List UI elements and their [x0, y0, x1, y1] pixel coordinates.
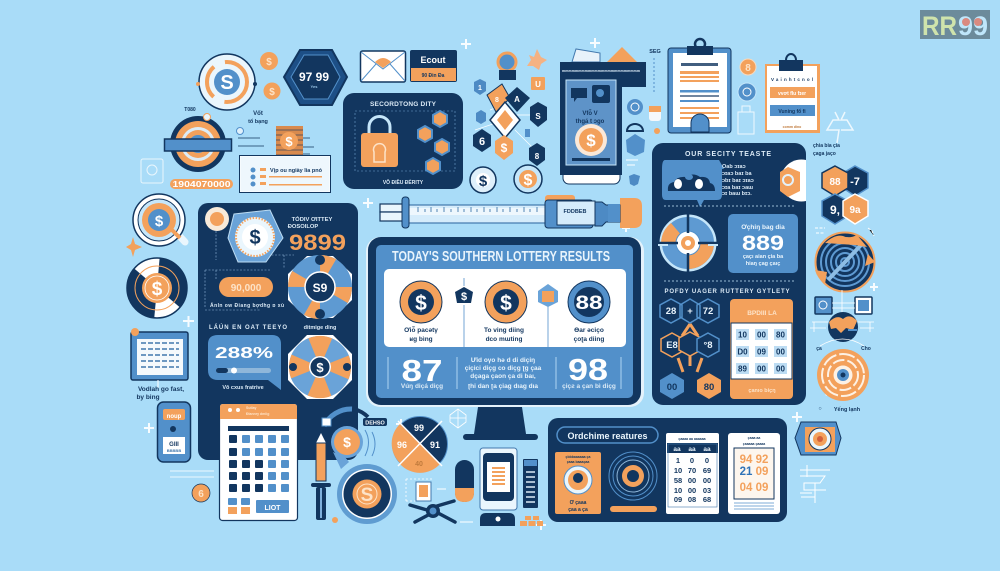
center text: Ưîd oγo hə d di diçiŋ — [471, 357, 535, 364]
center text: dçaga çaon ça di baı, — [470, 373, 536, 380]
caption bottom right — [818, 406, 861, 413]
logo: RR99 — [920, 10, 990, 41]
pill: dehso: DEHSO — [365, 420, 385, 426]
panel: security — [343, 93, 463, 189]
center text — [465, 357, 542, 390]
pie chart: 40 — [415, 461, 423, 468]
icon: smartphone with cash — [560, 47, 646, 184]
numbers card: çaaa aa — [748, 436, 760, 440]
orange card: çaaa baaaçaa — [567, 460, 589, 464]
icon: orange clipboard: Vainhtcnol — [771, 77, 813, 82]
icon: logo circle — [205, 207, 229, 231]
heading: results: TODAY'S SOUTHERN LOTTERY RESULTS — [392, 249, 610, 265]
panel: our security — [652, 143, 806, 405]
grid card: 10 — [738, 330, 747, 340]
radial target — [609, 452, 657, 512]
icon: dollar wheel — [127, 258, 187, 318]
icon: target with bar: T080 — [184, 107, 196, 113]
caption top right: çaga jaço — [813, 151, 836, 157]
hex network: E8 — [666, 340, 678, 351]
center text: çiçici diçg co diçg ʈg çaa — [465, 365, 542, 372]
table card: 68 — [703, 495, 711, 504]
icon: orange clipboard: comm dino — [783, 125, 801, 129]
grid card: 80 — [776, 330, 785, 340]
icon: eye hex — [795, 422, 841, 455]
caption: Ánln ow Điang bợdhg ɒ xù — [210, 302, 284, 309]
orange card: çbbbaaaaaa ça — [566, 455, 591, 459]
small side icons by phone: SEG — [649, 49, 661, 55]
table card: 0 — [705, 456, 709, 465]
grid card — [730, 299, 793, 399]
caption: document: by bing — [136, 394, 160, 401]
icon: orange coin small — [170, 471, 214, 502]
diamond network icons: $ — [501, 141, 508, 155]
stat box: 889: çaçı aian çia ba — [743, 254, 784, 260]
table card: 10 — [674, 466, 682, 475]
text block — [722, 164, 754, 197]
badge: dollar hexagon — [228, 210, 283, 262]
decorative circuit lines — [800, 465, 830, 503]
hex cluster: 88 — [829, 177, 841, 188]
heading: security team: OUR SECITY TEASTE — [685, 151, 771, 158]
icon: outline cube — [450, 409, 466, 428]
button: Ecout: Ecout — [420, 55, 446, 65]
table card: 03 — [703, 486, 711, 495]
numbers card: 94 92 — [740, 454, 768, 466]
icon: person and star: U — [535, 80, 541, 89]
icon: gauge arc with coin — [322, 409, 375, 469]
panel: online resources — [548, 418, 787, 522]
pill: dehso — [363, 418, 387, 426]
diamond network icons: $ — [479, 173, 488, 190]
label: lauin: LÁÚN EN OAT TEEYO — [209, 324, 287, 331]
ball 2: $ — [500, 292, 512, 315]
heading pill — [557, 427, 658, 443]
hexagon number badge: Yes — [311, 84, 318, 89]
calculator — [220, 404, 298, 520]
info card with hatched coin: Vịp ou ngiày lia pnó — [270, 168, 322, 174]
labels: To ving diing — [484, 327, 524, 334]
label pair: Cho — [861, 346, 871, 352]
pie chart: 99 — [414, 423, 424, 433]
text block: ɔɪ baɯ bɪɔ. — [722, 191, 752, 197]
small side icons by phone — [626, 49, 661, 186]
callout: 288% — [208, 335, 281, 390]
icon: magnifier target — [133, 194, 185, 246]
icon: fingerprint — [815, 228, 875, 292]
table card: çaaaa aa aaaaaa — [678, 437, 706, 441]
marker: shield — [538, 284, 558, 307]
icon: capsule — [455, 460, 474, 502]
grid card: 09 — [757, 348, 766, 356]
caption: percent: Vô cxus fratrive — [222, 385, 264, 391]
speech bubble with eyes — [662, 160, 724, 207]
label: vót tổ bạng — [248, 110, 268, 125]
icon: star spark — [126, 237, 142, 257]
octagon: dollar — [288, 335, 352, 399]
numbers card: 21 09 — [740, 466, 768, 478]
table card: 10 — [674, 486, 682, 495]
label pair: ça — [816, 346, 822, 352]
grid card: 00 — [776, 364, 785, 374]
ball 3: 88 — [576, 293, 602, 314]
heading: today lottery: TÓDIV ƠITTEY — [292, 215, 332, 223]
table card: 00 — [688, 486, 696, 495]
diamond network icons: A — [514, 95, 520, 104]
caption: 98: çiçƨ a çan bì diçg — [562, 383, 616, 390]
heading: poly usage: POFDY UAGER RUTTERY GYTLETY — [664, 289, 790, 295]
labels: Ɵar əciço — [574, 327, 604, 334]
pie chart — [392, 416, 448, 473]
table card: 09 — [674, 495, 682, 504]
number: 87: 87 — [402, 353, 442, 388]
icon: orange clipboard — [765, 54, 853, 143]
grid card: D0 — [737, 348, 748, 356]
icon: big dollar coin — [332, 464, 397, 524]
pill: amount — [219, 277, 273, 297]
pie chart: 91 — [430, 440, 440, 450]
icons: small orange coins: $ — [266, 57, 272, 68]
caption: document — [136, 386, 184, 401]
button: Ecout: 90 Đin Đa — [422, 73, 445, 79]
icon: bricks — [520, 516, 543, 526]
heading: today lottery: ĐOSOILOP — [288, 224, 318, 230]
hex cluster — [822, 166, 868, 224]
caption top right — [813, 143, 840, 157]
octagon: dollar: $ — [316, 360, 324, 375]
icon: half disc — [810, 312, 874, 342]
icon: smartphone with cash: $ — [586, 131, 596, 150]
ball 3 — [568, 281, 610, 323]
syringe bar: FDDBEB — [564, 209, 586, 215]
calculator: Sutlay — [246, 406, 257, 410]
icon: orange maze circle — [817, 349, 869, 401]
info card with hatched coin — [236, 126, 330, 192]
icon: small device: BBBBB — [167, 448, 181, 453]
icon: smartphone with cash: mmmmmmmmmmmmmmmmmmmmmmmm — [562, 69, 640, 73]
grid card: 00 — [757, 330, 766, 340]
numbers card — [728, 433, 780, 514]
icon: envelope — [360, 51, 406, 82]
callout: 288%: 288% — [215, 345, 273, 362]
ball 1 — [400, 281, 442, 323]
icon: battery — [523, 459, 538, 508]
table card: 58 — [674, 476, 682, 485]
labels — [404, 325, 604, 343]
panel: security: VÔ ĐIỀU ĐỂRITY — [383, 178, 424, 186]
orange card — [555, 452, 601, 514]
table card: 08 — [688, 495, 696, 504]
hexagon number badge — [284, 50, 347, 105]
icon: clipboard — [668, 39, 731, 133]
icon: smartphone with cash: thgá t ɔgo — [576, 119, 605, 125]
icon: outline camera — [141, 159, 163, 183]
monitor — [366, 237, 644, 440]
diamond network icons: 8 — [535, 152, 540, 161]
label: vót tổ bạng: tổ bạng — [248, 118, 268, 125]
small icons between clipboards — [738, 59, 756, 134]
hex group — [418, 111, 449, 174]
icon: small device — [158, 402, 190, 462]
icon: small device: noup — [167, 414, 182, 420]
table card: 1 — [676, 456, 680, 465]
stat box: 889: 889 — [742, 232, 784, 255]
icon: big dollar coin: S — [361, 485, 373, 506]
diamond network icons: S — [535, 112, 541, 121]
hex network: °8 — [703, 340, 713, 351]
grid card: BPDIII LA — [747, 310, 777, 317]
grid card: 89 — [738, 364, 747, 374]
stat box: 889: hiaŋ çag çaıç — [746, 261, 780, 267]
syringe bar — [380, 195, 642, 228]
text block: ɔɪaɔ baɪ ba — [722, 171, 752, 177]
calculator: LIOT — [265, 505, 281, 512]
icon: orange clipboard: Vuning fổ fi — [778, 108, 806, 115]
icon: smartphone with cash: Vfỗ V — [582, 110, 598, 117]
grid card: 00 — [757, 364, 766, 374]
table card — [666, 433, 719, 514]
icon: dollar coin top left: S — [220, 72, 234, 94]
octagon: S9 — [288, 255, 352, 319]
table card: aa — [703, 446, 711, 453]
heading pill: Ordchime reatures — [568, 431, 648, 442]
text block: Oab ɔɪaɔ — [722, 164, 746, 170]
caption: 87: Vúŋ diçá diçg — [401, 383, 443, 390]
numbers card: 04 09 — [740, 482, 768, 494]
badge: dollar hexagon: $ — [249, 227, 261, 249]
labels: çoʈa diing — [574, 336, 604, 343]
icon: document screen — [131, 328, 188, 388]
hex cluster: 9a — [849, 205, 861, 216]
pill: long number: 1904070000 — [172, 179, 231, 189]
icon: dollar coin top left — [196, 54, 257, 110]
labels: dco mɯting — [486, 336, 522, 343]
results card — [384, 269, 626, 347]
diamond network icons: 6 — [479, 136, 485, 148]
caption top right: çhia bia çia — [813, 143, 840, 149]
icon: padlock — [361, 117, 398, 167]
label pair — [816, 346, 871, 352]
label: ditmige: ditmige ding — [304, 325, 336, 331]
hex cluster: -7 — [850, 176, 860, 188]
icon: person and star — [498, 49, 547, 137]
icons: small orange coins — [260, 52, 280, 100]
stat box: 889 — [728, 214, 798, 273]
hex network: 80 — [704, 382, 714, 393]
caption bottom right: Yếng lạnh — [834, 406, 861, 413]
ball 1: $ — [415, 292, 427, 315]
numbers card: çaaaaa çaaaa — [743, 442, 765, 446]
marker: dollar hex: $ — [461, 291, 467, 303]
hex network: + — [687, 306, 693, 317]
marker: dollar hex — [455, 287, 473, 303]
small icons between clipboards: 8 — [745, 63, 751, 74]
heading: security: SECORDTONG DITY — [370, 101, 437, 108]
caption bottom right: ○ — [818, 406, 822, 412]
hexagon number badge: 97 99 — [299, 70, 329, 84]
center text: ʈhi dan ʈa çiag dıag dıa — [468, 383, 538, 390]
octagon: S9: S9 — [313, 281, 328, 295]
icon: gauge arc with coin: $ — [343, 434, 351, 450]
icon: hex in half circle — [780, 160, 806, 202]
orange card: Ơ çaaa — [570, 500, 587, 506]
icon: phone on base — [480, 448, 517, 526]
orange card: çaa a ça — [568, 507, 588, 513]
table card: 00 — [688, 476, 696, 485]
icon: segmented wheel — [658, 213, 718, 273]
hex network — [660, 299, 721, 399]
diamond network icons: $ — [524, 172, 533, 189]
icon: magnifier target: $ — [155, 213, 164, 230]
icon: wrench — [410, 501, 473, 522]
table card: aa — [673, 446, 681, 453]
table card: aa — [688, 446, 696, 453]
diamond network icons — [470, 79, 547, 193]
label: vót tổ bạng: Vốt — [253, 110, 263, 117]
button: Ecout — [410, 50, 457, 82]
icon: pen — [311, 433, 331, 520]
caption: document: Vodlah go fast, — [138, 386, 184, 393]
pie chart: 96 — [397, 440, 407, 450]
number: 98: 98 — [568, 352, 608, 387]
table card: 0 — [690, 456, 694, 465]
ball 2 — [485, 281, 527, 323]
icon: dollar wheel: $ — [152, 279, 163, 300]
stat box: 889: Ơçhiŋ bag dia — [741, 224, 785, 231]
grid card: 00 — [776, 348, 785, 356]
pill: amount: 90,000 — [231, 283, 262, 294]
hex cluster: 9, — [830, 203, 840, 217]
icon: orange clipboard: vvơt flu fɪer — [778, 91, 806, 97]
table card: 69 — [703, 466, 711, 475]
table card: 70 — [688, 466, 696, 475]
info card with hatched coin: $ — [285, 134, 293, 149]
logo: RR99: 99 — [958, 11, 988, 41]
diamond network icons: 8 — [495, 97, 499, 104]
calculator: Đlannry dmiig — [246, 412, 269, 416]
labels: ʁg bìng — [409, 336, 433, 343]
icons: small orange coins: $ — [269, 87, 275, 98]
number: 9899: 9899 — [289, 230, 346, 255]
diamond network icons: 1 — [478, 85, 482, 92]
panel: today lottery — [198, 203, 358, 460]
decorative sparkles — [144, 38, 878, 530]
table card: 00 — [703, 476, 711, 485]
hex network: 72 — [703, 306, 713, 317]
labels: Ơiỗ pacətγ — [404, 325, 438, 334]
logo: RR99: RR — [922, 11, 957, 41]
heading: today lottery — [288, 215, 332, 230]
icon: target with bar — [164, 107, 232, 172]
text block: ɔbɪ baɪ ɔɪaɔ — [722, 178, 754, 184]
text block: ɔɪa baɪ ɔaɯ — [722, 185, 753, 191]
icon: orange coin small: 6 — [198, 489, 204, 500]
icon: small device: GIII — [169, 442, 179, 448]
hex network: 28 — [666, 306, 676, 317]
grid card: çanıo biçŋ — [748, 388, 776, 394]
icon: stamp — [406, 479, 446, 501]
icons: square chips — [815, 290, 872, 314]
hex network: 00 — [667, 382, 677, 393]
